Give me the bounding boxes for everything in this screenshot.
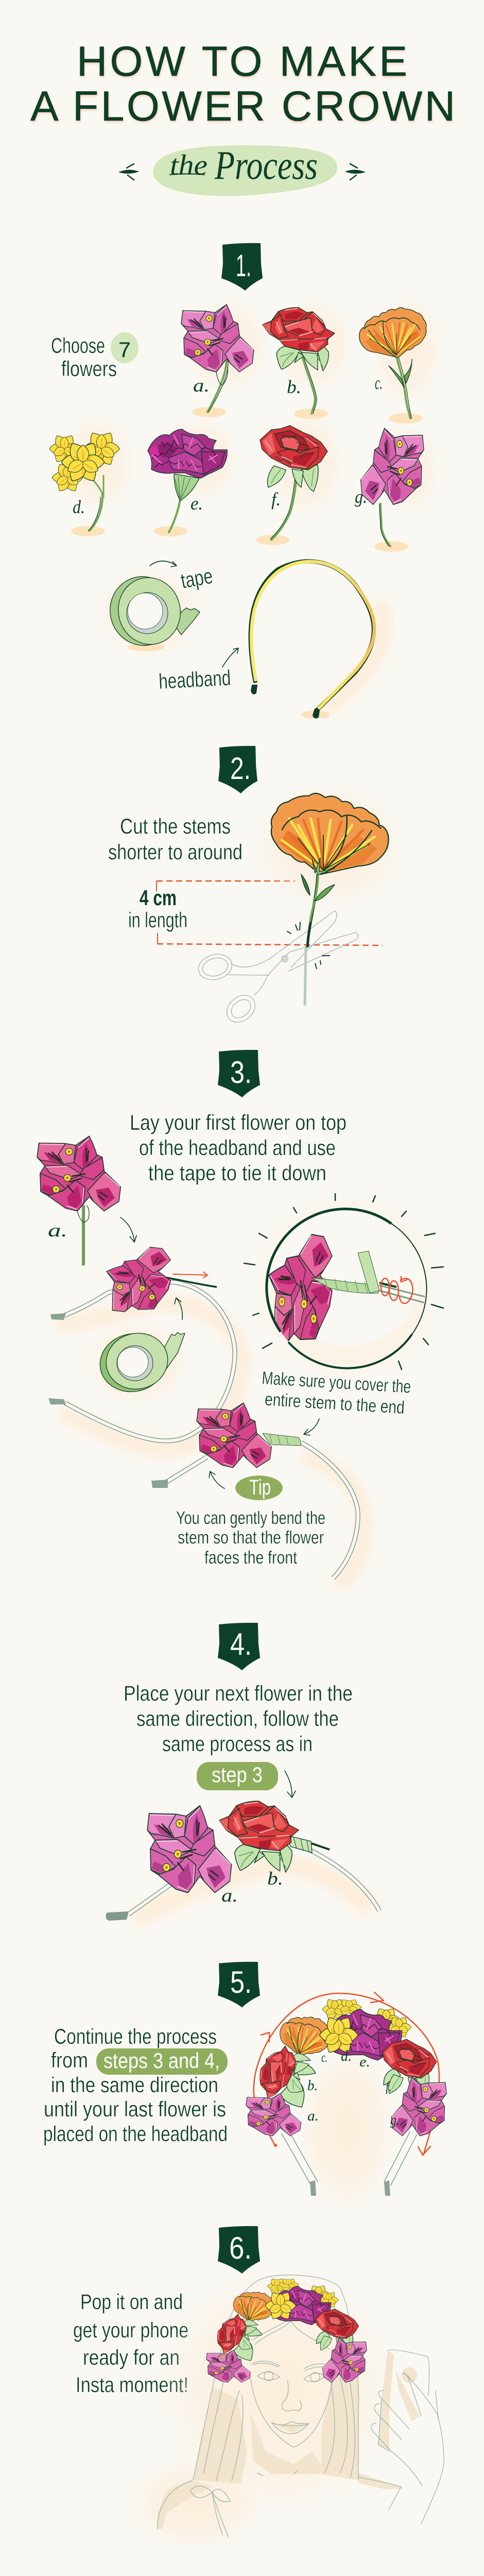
text: choose 7 flowers: flowers [61, 357, 117, 381]
step 1 badge: 1. [236, 248, 251, 283]
crown labels: e. [359, 2054, 370, 2070]
panel: step 5 continue [43, 1992, 446, 2213]
text: continue the process: from [51, 2048, 88, 2072]
text: 4 cm in length: 4 cm [140, 886, 177, 910]
subtitle: the Process: the [170, 149, 208, 181]
step 4 badge: 4. [230, 1627, 252, 1662]
panel: step 2 cut stems [108, 781, 409, 1028]
crown labels: a. [307, 2108, 319, 2124]
text: lay your first flower: of the headband and use [139, 1136, 336, 1160]
step 6 badge [218, 2226, 260, 2274]
text: place your next flower: same direction, follow the [136, 1706, 339, 1731]
step 2 badge [218, 746, 257, 793]
zoom circle detail [244, 1191, 443, 1386]
label: tape: tape [179, 564, 215, 593]
arrow: to headband [222, 648, 238, 667]
flower e: e. [191, 493, 203, 514]
flower a: a. [193, 375, 210, 396]
text: lay your first flower: Lay your first flower on top [130, 1110, 347, 1134]
text: 4 cm in length [128, 886, 187, 932]
step 2 badge: 2. [230, 751, 251, 786]
text: tip body: You can gently bend the [176, 1508, 325, 1528]
flower a with stem: a. [48, 1220, 67, 1241]
flower d [49, 415, 136, 536]
title [30, 38, 455, 130]
finished flower on headband [151, 1403, 365, 1582]
flower d: d. [73, 497, 85, 517]
flower g: g. [355, 486, 367, 507]
icon: scissors [196, 911, 358, 1028]
text: continue the process: steps 3 and 4, [103, 2048, 220, 2073]
step 1 badge [221, 243, 263, 291]
flower b [263, 296, 355, 419]
measure lines [157, 881, 383, 945]
text: make sure you cover: entire stem to the end [264, 1389, 405, 1418]
text: 4 cm in length: in length [128, 908, 187, 932]
subtitle: the Process [120, 143, 364, 196]
step 3 badge [218, 1050, 260, 1097]
arrow: flower to headband [120, 1217, 136, 1242]
crown labels: f. [386, 2079, 392, 2094]
text: choose 7 flowers: 7 [118, 337, 131, 362]
text: pop it on: Pop it on and [80, 2290, 183, 2314]
tip pill [235, 1475, 283, 1500]
icon: tape roll [95, 567, 203, 659]
icon: headband [251, 561, 384, 719]
crown in progress: b. [267, 1868, 283, 1889]
text: cut the stems: shorter to around [108, 840, 243, 864]
flower g [355, 422, 440, 552]
illustration: girl wearing crown [129, 2262, 444, 2550]
text: continue the process [43, 2024, 228, 2146]
panel: step 3 tie first flower [37, 1110, 443, 1582]
text: cut the stems: Cut the stems [120, 814, 231, 838]
step 5 badge: 5. [230, 1965, 252, 1999]
arrow: pull direction [173, 1272, 208, 1278]
text: continue the process: Continue the process [54, 2024, 217, 2048]
label: headband: headband [158, 666, 231, 693]
pill: step 3: step 3 [212, 1762, 263, 1787]
panel: step 1 materials [49, 294, 443, 719]
panel: step 6 selfie [73, 2262, 444, 2550]
title: HOW TO MAKE [77, 38, 407, 85]
text: place your next flower: Place your next flower in the [124, 1681, 353, 1705]
text: pop it on: Insta moment! [76, 2372, 188, 2397]
text: place your next flower: same process as in [162, 1732, 313, 1756]
flower b: b. [287, 377, 301, 397]
flower f: f. [271, 489, 281, 510]
crown labels [307, 2047, 400, 2128]
arrow: to tape [150, 561, 177, 567]
pill: step 3 [197, 1762, 278, 1790]
finished crown with direction arrows [246, 1992, 446, 2213]
text: tip body: stem so that the flower [178, 1528, 324, 1548]
text: cut the stems [108, 814, 243, 864]
text: pop it on: get your phone [73, 2318, 188, 2342]
flower e [148, 415, 242, 536]
crown in progress [106, 1801, 379, 1921]
crown labels: g. [390, 2112, 400, 2128]
step 3 badge: 3. [230, 1055, 252, 1090]
text: place your next flower [124, 1681, 353, 1756]
arrow: tape to flower [175, 1298, 182, 1319]
flower f [256, 410, 345, 545]
crown labels: c. [321, 2050, 327, 2065]
flower c [359, 294, 443, 423]
looped headband [48, 1282, 242, 1450]
text: continue the process: placed on the headband [43, 2122, 228, 2146]
text: pop it on: ready for an [83, 2345, 180, 2369]
crown in progress: a. [221, 1885, 238, 1906]
crown labels: b. [307, 2078, 318, 2094]
flower a [181, 296, 270, 417]
text: lay your first flower: the tape to tie it down [148, 1161, 326, 1185]
step 6 badge: 6. [229, 2231, 252, 2265]
text: tip body [176, 1508, 325, 1568]
icon: tape roll 2 [82, 1319, 191, 1406]
skin and hair shadows [158, 2351, 420, 2529]
crown labels: d. [341, 2047, 352, 2064]
step 4 badge [218, 1623, 260, 1670]
text: continue the process: in the same direction [51, 2073, 218, 2097]
flower placed on headband [107, 1247, 217, 1312]
text: make sure you cover: Make sure you cover the [262, 1368, 411, 1397]
text: tip body: faces the front [204, 1548, 297, 1568]
arrow: to wrapped stem [304, 1419, 319, 1435]
text: choose 7 flowers [51, 332, 139, 381]
arrow: tip [209, 1471, 224, 1488]
subtitle: the Process: Process [214, 143, 318, 188]
text: choose 7 flowers: Choose [51, 333, 105, 358]
arrow: to rose [285, 1771, 296, 1798]
text: pop it on [73, 2290, 188, 2397]
flower: big orange carnation [250, 781, 409, 947]
flower a with stem [37, 1136, 120, 1265]
line art: hair and face [158, 2275, 444, 2537]
flower c: c. [375, 372, 383, 393]
text: lay your first flower [130, 1110, 347, 1185]
tip pill: Tip [249, 1475, 271, 1499]
panel: step 4 next flower [106, 1681, 379, 1921]
step 5 badge [218, 1962, 260, 2007]
text: continue the process: until your last flower is [44, 2097, 226, 2121]
text: make sure you cover [260, 1368, 411, 1418]
title: A FLOWER CROWN [30, 83, 455, 130]
